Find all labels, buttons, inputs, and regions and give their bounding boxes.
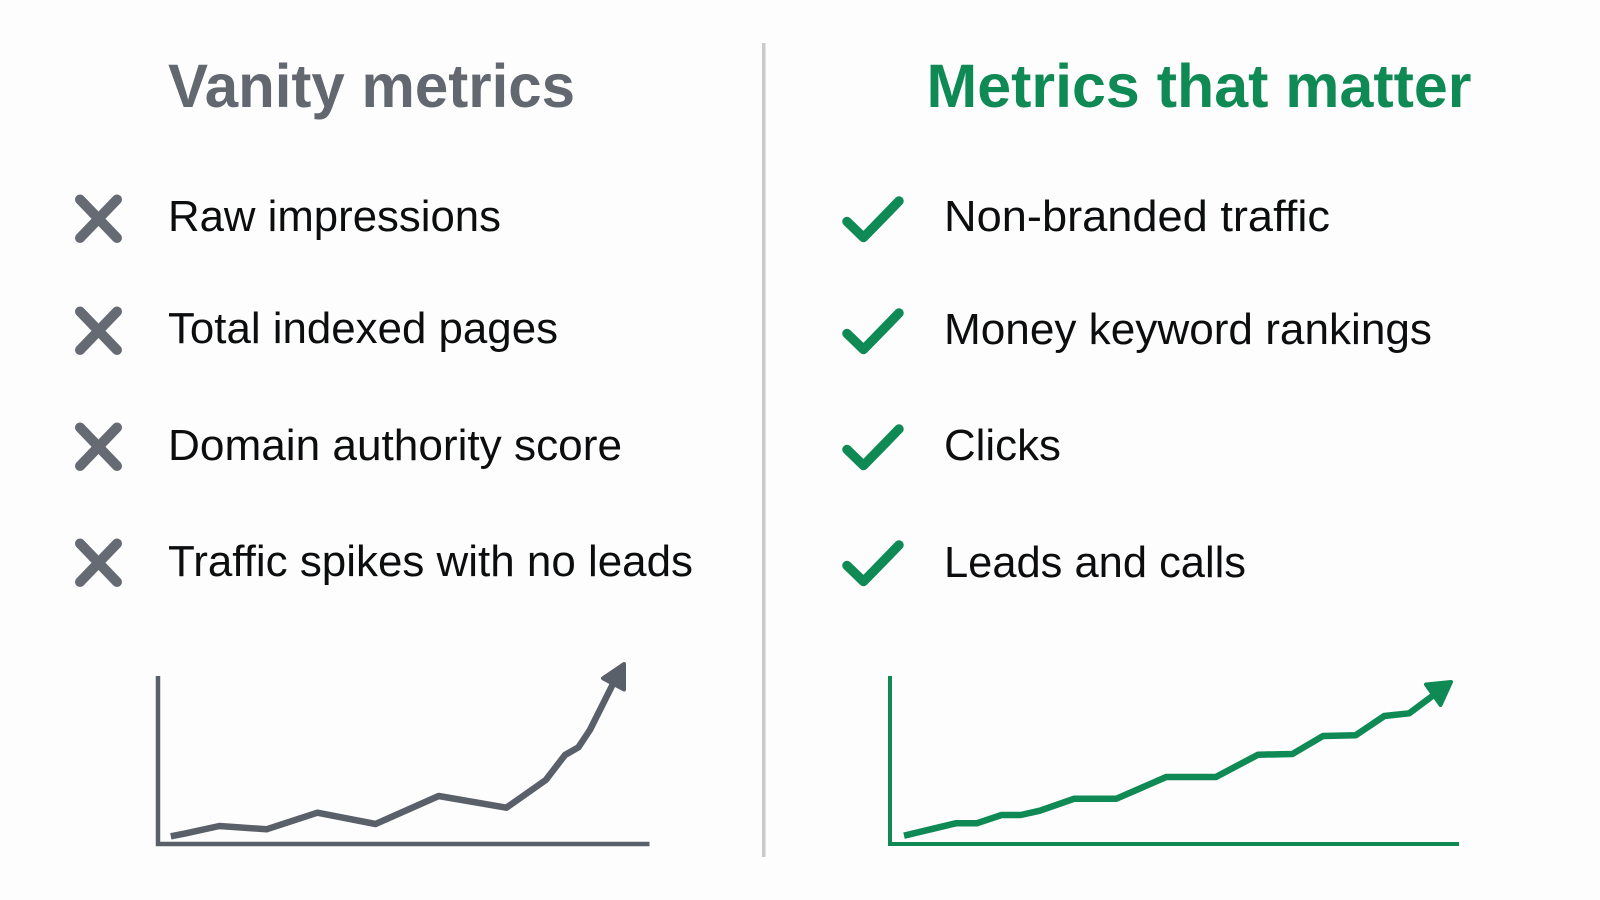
icon: cross bbox=[80, 428, 117, 466]
list: vanity metrics items bbox=[80, 192, 693, 586]
item: Domain authority score: Domain authority score bbox=[168, 421, 622, 470]
item: Money keyword rankings: Money keyword rankings bbox=[944, 305, 1432, 354]
chart axes bbox=[890, 676, 1459, 844]
icon: cross bbox=[80, 312, 117, 350]
item: Non-branded traffic: Non-branded traffic bbox=[944, 192, 1330, 241]
item: Clicks bbox=[847, 421, 1061, 470]
item: Raw impressions: Raw impressions bbox=[168, 192, 501, 241]
item: Traffic spikes with no leads: Traffic spikes with no leads bbox=[168, 537, 693, 586]
icon: cross bbox=[80, 200, 117, 238]
arrow head bbox=[603, 664, 624, 690]
chart line bbox=[904, 693, 1436, 836]
panel: metrics that matter bbox=[847, 52, 1472, 844]
icon: check bbox=[847, 201, 899, 238]
heading: Metrics that matter: Metrics that matter bbox=[926, 52, 1472, 120]
icon: check bbox=[847, 545, 899, 582]
heading: Vanity metrics: Vanity metrics bbox=[168, 52, 575, 120]
chart axes bbox=[158, 676, 650, 844]
arrow head bbox=[1426, 682, 1451, 705]
chart line bbox=[171, 677, 617, 836]
icon: check bbox=[847, 429, 899, 466]
item: Clicks: Clicks bbox=[944, 421, 1061, 470]
list: metrics that matter items bbox=[847, 192, 1432, 587]
icon: cross bbox=[80, 544, 117, 582]
item: Leads and calls: Leads and calls bbox=[944, 538, 1246, 587]
chart: steady growth line bbox=[890, 676, 1459, 844]
panel: vanity metrics bbox=[80, 52, 693, 844]
chart: vanity spike line bbox=[158, 664, 650, 844]
icon: check bbox=[847, 313, 899, 350]
item: Total indexed pages: Total indexed pages bbox=[168, 304, 558, 353]
